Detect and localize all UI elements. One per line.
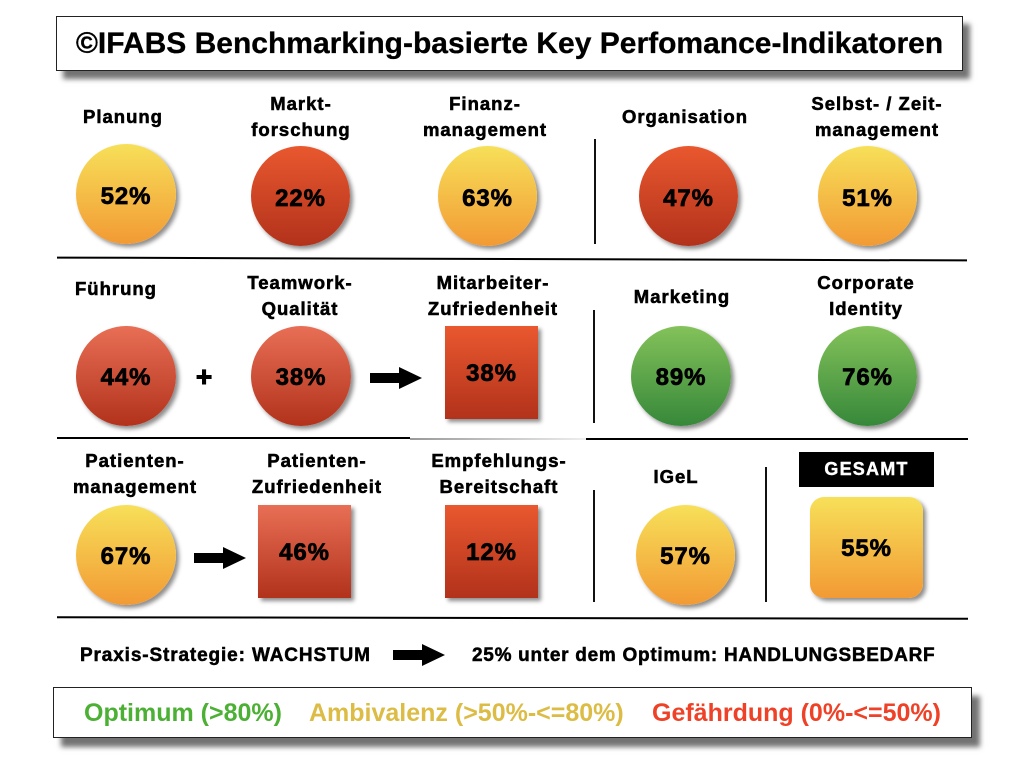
label: Marketing: Marketing — [634, 286, 730, 307]
indicator: Organisation 47%: 47% — [663, 185, 714, 212]
label: Patienten-Zufriedenheit: Patienten- — [267, 450, 367, 471]
indicator: Empfehlungs-Bereitschaft 12% — [445, 505, 538, 598]
indicator: IGeL 57% — [636, 505, 735, 605]
label: Mitarbeiter-Zufriedenheit: Zufriedenheit — [428, 298, 558, 319]
label: Selbst- / Zeitmanagement — [811, 93, 943, 140]
title — [56, 16, 963, 71]
plus sign: + — [196, 361, 212, 392]
indicator: GESAMT 55% — [810, 497, 923, 598]
legend: Ambivalenz: Ambivalenz (>50%-<=80%) — [309, 699, 624, 727]
indicator: Marktforschung 22%: 22% — [275, 185, 326, 212]
indicator: GESAMT 55%: 55% — [841, 534, 892, 562]
label: Mitarbeiter-Zufriedenheit — [428, 272, 558, 319]
indicator: Marketing 89%: 89% — [656, 364, 706, 391]
label: Marktforschung: forschung — [251, 119, 351, 140]
indicator: Teamwork-Qualität 38%: 38% — [276, 364, 326, 391]
indicator: Planung 52% — [76, 144, 176, 244]
indicator: Corporate Identity 76%: 76% — [842, 364, 893, 391]
label: Patienten-Zufriedenheit — [252, 450, 382, 497]
strategy text: Praxis-Strategie: WACHSTUM — [80, 645, 371, 666]
indicator: Mitarbeiter-Zufriedenheit 38% — [445, 326, 538, 419]
indicator: Marketing 89% — [631, 326, 731, 426]
arrow: strategy to result — [393, 644, 445, 666]
indicator: Finanzmanagement 63%: 63% — [462, 185, 513, 212]
indicator: IGeL 57%: 57% — [660, 543, 711, 570]
label: Mitarbeiter-Zufriedenheit: Mitarbeiter- — [437, 272, 549, 293]
label: Patientenmanagement: Patienten- — [85, 450, 185, 471]
label: Marktforschung: Markt- — [270, 93, 332, 114]
label: Empfehlungs-Bereitschaft: Bereitschaft — [440, 476, 558, 497]
legend: Gefährdung: Gefährdung (0%-<=50%) — [652, 699, 941, 727]
label: Finanzmanagement — [423, 93, 547, 140]
indicator: Organisation 47% — [639, 146, 738, 246]
label: Planung: Planung — [83, 106, 163, 127]
arrow: Patientenmanagement to Zufriedenheit — [194, 547, 246, 569]
label: Corporate Identity: Identity — [829, 298, 903, 319]
indicator: Corporate Identity 76% — [818, 326, 917, 426]
label: GESAMT: GESAMT — [824, 459, 909, 479]
legend — [53, 687, 972, 738]
label: Patienten-Zufriedenheit: Zufriedenheit — [252, 476, 382, 497]
label: Patientenmanagement — [73, 450, 197, 498]
label: Marktforschung — [251, 93, 351, 140]
title: ©IFABS Benchmarking-basierte Key Perfomance-Indikatoren — [76, 27, 943, 60]
label: Teamwork-Qualität — [247, 272, 353, 320]
label: Finanzmanagement: management — [423, 119, 547, 140]
indicator: Marktforschung 22% — [251, 146, 350, 246]
indicator: Patienten-Zufriedenheit 46%: 46% — [279, 538, 330, 566]
label: Teamwork-Qualität: Teamwork- — [247, 272, 353, 293]
label: Selbst- / Zeitmanagement: management — [815, 119, 939, 140]
label: IGeL: IGeL — [653, 466, 699, 487]
indicator: Patientenmanagement 67%: 67% — [101, 543, 151, 570]
indicator: Planung 52%: 52% — [101, 182, 151, 210]
indicator: Mitarbeiter-Zufriedenheit 38%: 38% — [466, 360, 517, 386]
label: Selbst- / Zeitmanagement: Selbst- / Zeit- — [811, 93, 943, 114]
result text: 25% unter dem Optimum: HANDLUNGSBEDARF — [472, 645, 935, 666]
indicator: Teamwork-Qualität 38% — [251, 326, 351, 426]
label: Organisation: Organisation — [622, 106, 748, 127]
label: Führung: Führung — [75, 278, 157, 299]
label: Corporate Identity: Corporate — [817, 272, 915, 293]
label: Patientenmanagement: management — [73, 476, 197, 497]
label: GESAMT — [799, 452, 934, 487]
indicator: Führung 44%: 44% — [101, 364, 151, 391]
label: Teamwork-Qualität: Qualität — [262, 298, 338, 319]
indicator: Patientenmanagement 67% — [76, 505, 176, 605]
indicator: Selbst- / Zeitmanagement 51%: 51% — [842, 185, 893, 212]
label: Empfehlungs-Bereitschaft — [431, 450, 567, 497]
indicator: Patienten-Zufriedenheit 46% — [258, 505, 351, 598]
indicator: Empfehlungs-Bereitschaft 12%: 12% — [466, 538, 517, 566]
legend: Optimum: Optimum (>80%) — [84, 699, 282, 727]
indicator: Finanzmanagement 63% — [438, 146, 537, 246]
label: Corporate Identity — [817, 272, 915, 320]
arrow: Teamwork to Mitarbeiter — [370, 367, 422, 389]
indicator: Führung 44% — [76, 326, 176, 426]
indicator: Selbst- / Zeitmanagement 51% — [818, 146, 917, 246]
label: Empfehlungs-Bereitschaft: Empfehlungs- — [431, 450, 567, 471]
label: Finanzmanagement: Finanz- — [449, 93, 521, 114]
